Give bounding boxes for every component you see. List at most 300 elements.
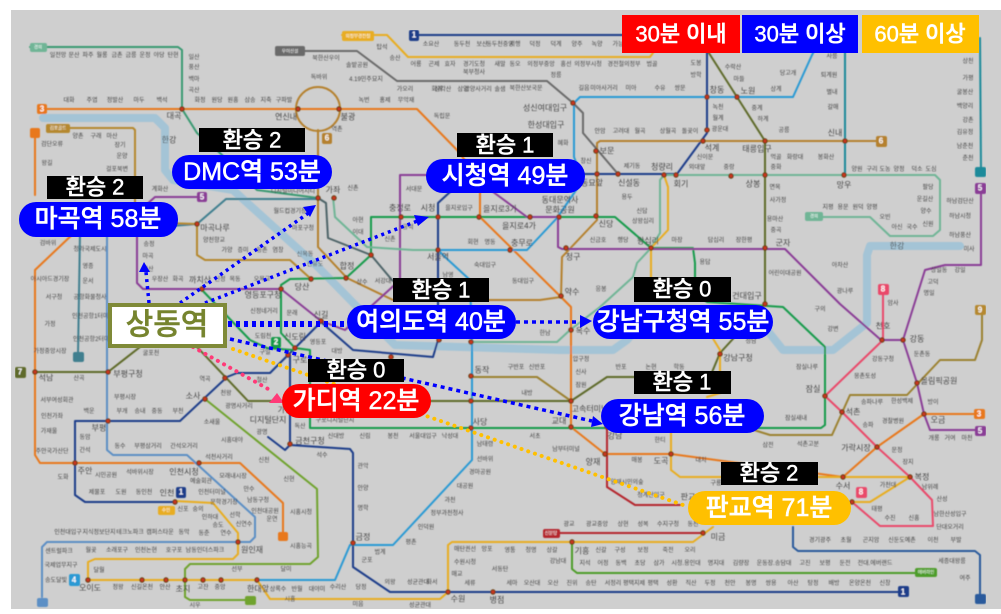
transfer tag: Magok: 환승 2 (66, 174, 124, 200)
station labels: small: 시흥대야 (221, 436, 244, 444)
legend: over 60 minutes: 60분 이상 (874, 22, 966, 46)
station labels: small: 신사 (575, 368, 587, 376)
station labels: small: 안산 (159, 583, 171, 591)
station labels: small: 온양온천 (849, 579, 871, 587)
station labels: small: 봉명 (745, 579, 757, 587)
station labels: small: 곤제 (428, 60, 440, 68)
station labels: small: 진위 (566, 579, 578, 587)
station labels: small: 신금호 (590, 236, 607, 244)
line number badges: 3 (40, 104, 45, 114)
station labels: small: 주안국가산단 (35, 447, 69, 455)
station labels: small: 가오리 (397, 85, 413, 93)
station labels: small: 굴포천 (143, 349, 159, 357)
station labels: small: 인덕원 (418, 523, 434, 531)
station labels: small: 미음 (352, 600, 364, 608)
station labels: small: 문정 (891, 447, 903, 454)
station labels: small: 어린이대공원 (768, 269, 802, 277)
station labels: large: 가산 (278, 404, 293, 414)
legend: over 30 minutes (742, 15, 858, 53)
station labels: small: 월곡 (634, 127, 646, 135)
line number badges: 5 (978, 426, 983, 436)
station labels: small: 지석 (579, 559, 591, 567)
station labels: small: 신이문 (697, 153, 714, 161)
station labels: small: 시흥시청 (290, 508, 312, 516)
station labels: small: 잠실나루 (796, 363, 819, 371)
station labels: small: 구의 (814, 305, 826, 313)
station labels: small: 대공원 (457, 482, 473, 490)
station labels: large: 연신내 (275, 112, 297, 122)
station labels: small: 가천대 (880, 481, 896, 489)
line number badges: 경의 (810, 212, 818, 220)
station labels: small: 용문 (837, 204, 849, 211)
station labels: small: 사릉 (826, 52, 838, 60)
station labels: small: 학동 (673, 363, 685, 371)
line number badges: 신분당 (545, 530, 557, 536)
station labels: small: 탑석 (376, 43, 388, 51)
station labels: small: 지식정보단지 (82, 528, 116, 536)
station labels: small: 성복 (637, 520, 649, 528)
station labels: small: 삼각산 (435, 85, 452, 93)
station labels: small: 지평 (822, 203, 834, 211)
station labels: small: 상계 (770, 85, 782, 93)
station labels: small: 상록수 (270, 585, 287, 593)
station labels: small: 가정 (44, 320, 56, 328)
station labels: small: 탕정 (807, 580, 819, 587)
station labels: small: 백석 (156, 96, 168, 104)
station labels: small: 매봉 (631, 456, 643, 464)
station labels: small: 달월 (93, 566, 105, 574)
line number badges: 의정부경전철 (346, 32, 370, 40)
station labels: small: 마장 (671, 236, 683, 244)
station labels: small: 동백 (615, 559, 627, 567)
station labels: small: 하남시청 (949, 212, 971, 220)
station labels: small: 삼전 (762, 441, 774, 449)
station labels: small: 천왕 (220, 389, 232, 397)
station labels: small: 팔당 (922, 183, 934, 191)
station labels: small: 오산대 (524, 579, 540, 587)
station labels: small: 중랑 (723, 164, 735, 171)
station labels: small: 송내 (134, 407, 146, 415)
station labels: large: 강동 (910, 334, 924, 344)
line number badges: 6 (879, 136, 884, 146)
station labels: small: 신림 (359, 432, 371, 440)
station labels: small: 구래 (90, 132, 102, 140)
line number badges: 경의 (34, 44, 42, 50)
station labels: small: 아시아드경기장 (31, 275, 70, 283)
station labels: small: 인천가좌 (41, 412, 64, 420)
station labels: small: 남부터미널 (552, 445, 580, 453)
station labels: small: 삼송 (244, 96, 256, 104)
station labels: small: 검바위 (40, 239, 56, 247)
station labels: small: 초당 (634, 559, 646, 567)
station labels: small: 모래내시장 (219, 472, 247, 480)
station labels: small: 망포 (481, 545, 493, 553)
station labels: large: 고속터미널 (572, 404, 608, 414)
station labels: small: 매교 (451, 570, 463, 578)
station labels: small: 경기광주 (809, 536, 832, 544)
station labels: small: 동두천중앙 (486, 40, 514, 48)
line number badges: 8 (881, 284, 886, 294)
station labels: small: 월롱 (96, 51, 108, 59)
pill: Magok (19, 202, 178, 237)
transfer tag: Pangyo (721, 460, 818, 486)
station labels: small: 고덕 (927, 279, 939, 286)
station labels: large: 석계 (705, 142, 719, 152)
station labels: small: 송산 (389, 54, 401, 62)
station labels: large: 마곡나루 (200, 224, 230, 232)
station labels: small: 백양리 (957, 102, 973, 110)
station labels: small: 시우 (189, 602, 201, 609)
station labels: small: 수리산 (330, 583, 347, 591)
station labels: small: 먹골 (770, 153, 782, 161)
station labels: small: 시민공원 (95, 471, 117, 479)
station labels: small: 양수 (920, 207, 932, 215)
station labels: small: 반월 (291, 585, 303, 593)
station labels: small: 석바위시장 (126, 468, 154, 476)
station labels: small: 신둔도예촌 (888, 536, 916, 544)
station labels: small: 봉화산 (818, 153, 835, 161)
station labels: small: 북한산우이 (312, 54, 340, 62)
station labels: small: 남한산성입구 (933, 510, 967, 518)
station labels: small: 개롱 (928, 434, 940, 442)
station labels: large: 천호 (876, 320, 890, 330)
pill: Gangnam: 강남역 56분 (619, 402, 745, 430)
station labels: small: 장한평 (736, 236, 752, 244)
station labels: large: 한강 (162, 134, 177, 144)
station labels: small: 강동구청 (872, 355, 894, 363)
station labels: small: 구성 (614, 546, 626, 554)
station labels: small: 보산 (476, 40, 488, 48)
station labels: small: 남위례 (922, 483, 938, 491)
station labels: small: 무악재 (398, 96, 414, 104)
station labels: large: 디지털단지 (250, 414, 286, 424)
station labels: small: 부평시장 (114, 393, 137, 401)
station labels: small: 명동 (484, 238, 496, 246)
station labels: small: 달미 (280, 565, 292, 573)
station labels: small: 서정리 (605, 579, 621, 587)
transfer tag: Magok (47, 174, 143, 200)
station labels: small: 성환 (666, 579, 678, 587)
station labels: small: 삼양 (457, 85, 469, 93)
station labels: large: 사당 (473, 416, 488, 426)
station labels: small: 직산 (685, 579, 697, 587)
station labels: large: 대곡 (167, 112, 181, 120)
station labels: small: 수지구청 (657, 520, 679, 528)
station labels: small: 4.19민주묘지 (349, 75, 383, 83)
station labels: small: 구파발 (276, 96, 293, 104)
dotted route: to DMC (180, 205, 316, 303)
legend: over 60 minutes (862, 15, 979, 53)
station labels: large: 수원 (451, 594, 465, 604)
station labels: small: 석천사거리 (205, 453, 233, 461)
line number badges: 1 (179, 488, 184, 496)
station labels: small: 당고개 (780, 69, 796, 77)
station labels: large: 충정로 (389, 202, 411, 212)
station labels: small: 구로디지털단지 (316, 416, 354, 424)
station labels: large: 군자 (776, 238, 791, 248)
station labels: small: 선유도 (307, 260, 324, 268)
station labels: small: 중계 (751, 104, 763, 112)
station labels: large: 주안 (78, 466, 93, 476)
station labels: large: 상봉 (746, 178, 760, 188)
station labels: small: 소요산 (423, 40, 440, 48)
station labels: small: 고잔 (197, 583, 209, 591)
station labels: small: 소래포구 (106, 546, 129, 554)
station labels: small: 미사 (963, 245, 975, 253)
station labels: small: 정부과천청사 (430, 509, 464, 517)
dotted route: to Gangnam-gu Office (516, 315, 592, 328)
station labels: small: 방학 (690, 71, 702, 79)
station labels: small: 부발 (950, 536, 962, 544)
station labels: large: 초지 (176, 584, 190, 594)
station labels: large: 문화공원 (545, 206, 575, 214)
station labels: small: 하계 (757, 115, 769, 123)
station labels: small: 인천대입구 (54, 528, 82, 536)
station labels: small: 강일 (954, 266, 966, 274)
station labels: large: 소사 (186, 392, 201, 400)
station labels: small: 영통 (504, 546, 516, 554)
station labels: small: 수진 (884, 514, 896, 522)
station labels: small: 산성 (936, 495, 948, 503)
station labels: large: 부평구청 (113, 368, 143, 378)
transfer tag: Yeouido: 환승 1 (412, 278, 470, 302)
station labels: small: 상갈 (546, 546, 558, 554)
station labels: small: 국수 (906, 224, 918, 231)
station labels: small: 제기동 (624, 162, 641, 170)
station labels: small: 송파나루 (861, 398, 884, 406)
station labels: large: 불광 (341, 112, 356, 122)
transfer tag: Gasan Digital (308, 358, 404, 382)
station labels: small: 동오 (509, 61, 521, 68)
station labels: large: 동작 (475, 364, 490, 374)
station labels: large: 옥수 (576, 326, 590, 336)
station labels: small: 동춘 (198, 529, 210, 537)
station labels: small: 암사 (887, 299, 899, 307)
station labels: small: 제물포 (89, 488, 106, 496)
station labels: small: 연수 (220, 529, 232, 537)
station labels: small: 인천대공원 (251, 507, 279, 515)
station labels: small: 성균관대 (409, 601, 431, 609)
station labels: small: 화서 (426, 578, 438, 586)
station labels: small: 북부청사 (463, 68, 486, 76)
line number badges: 4 (72, 576, 77, 584)
pill: Pangyo (688, 491, 851, 525)
station labels: small: 숙대입구 (474, 261, 497, 269)
station labels: small: 어정 (597, 559, 609, 567)
station labels: small: 봉천 (387, 432, 399, 440)
station labels: small: 역곡 (199, 375, 211, 383)
station labels: small: 용답 (699, 259, 711, 266)
station labels: small: 인하대 (202, 513, 218, 521)
station labels: large: 오금 (931, 416, 945, 424)
station labels: small: 강변 (827, 325, 839, 333)
station labels: small: 신길온천 (131, 583, 153, 591)
line number badges: 7 (18, 368, 23, 376)
station labels: small: 수원시청 (454, 558, 476, 566)
station labels: small: 중동 (151, 408, 163, 415)
station labels: large: 신길 (314, 310, 328, 320)
station labels: small: 철산 (256, 376, 268, 384)
station labels: small: 구리 (866, 165, 878, 173)
transfer tag: Gangnam-gu Office: 환승 0 (653, 276, 711, 302)
station labels: small: 석촌고분 (797, 440, 820, 448)
station labels: small: 신답 (636, 207, 648, 215)
station labels: small: 명일 (923, 289, 935, 297)
station labels: small: 예술회관 (190, 477, 213, 485)
station labels: small: 세종대왕릉 (938, 557, 966, 565)
station labels: small: 압구정 (573, 355, 589, 363)
station labels: large: 복정 (915, 472, 929, 482)
station labels: small: 도농 (879, 166, 891, 173)
station labels: small: 곤지암 (863, 536, 880, 544)
station labels: small: 삼양사거리 (464, 85, 492, 93)
station labels: large: 판교 (681, 492, 695, 502)
pill: Gangnam (601, 399, 764, 433)
station labels: small: 평택 (647, 579, 659, 587)
station labels: small: 신정네거리 (250, 307, 278, 315)
station labels: small: 효자 (444, 60, 456, 68)
station labels: small: 여주 (959, 574, 971, 582)
station labels: small: 걸포북변 (106, 165, 128, 173)
station labels: small: 양원 (851, 165, 863, 173)
station labels: small: 솔밭공원 (346, 61, 368, 69)
station labels: small: 김량장 (733, 559, 750, 567)
transfer tag: Gangnam: 환승 1 (653, 370, 711, 394)
station labels: small: 돌곶이 (682, 127, 698, 135)
station labels: small: 미아 (625, 84, 637, 92)
station labels: small: 굴봉산 (957, 88, 974, 96)
pill: City Hall (426, 159, 585, 193)
line number badges: 8 (859, 488, 864, 496)
station labels: small: 명학 (357, 504, 369, 512)
station labels: small: 문산 (68, 51, 80, 59)
station labels: small: 서강대 (375, 277, 391, 285)
station labels: small: 청계산입구 (637, 491, 665, 499)
station labels: small: 도림천 (255, 332, 271, 340)
pill: Magok: 마곡역 58분 (35, 205, 161, 233)
station labels: small: 상현 (617, 520, 629, 528)
station labels: small: 두정 (704, 580, 716, 587)
station labels: small: 센트럴파크 (45, 547, 73, 555)
station labels: large: 미금 (711, 532, 725, 542)
line number badges: 5 (200, 192, 205, 202)
station labels: small: 춘천 (962, 154, 974, 162)
station labels: small: 신연수 (236, 520, 253, 528)
station labels: large: 도곡 (654, 456, 668, 466)
station labels: small: 시흥능곡 (290, 542, 313, 550)
station labels: small: 월곶 (85, 546, 97, 554)
station labels: small: 신촌 (347, 184, 359, 192)
station labels: small: 녹양 (591, 40, 603, 48)
station labels: small: 탄현 (167, 51, 179, 59)
dotted route: to Gasan Digital (193, 347, 284, 403)
station labels: small: 둔촌동 (914, 350, 931, 358)
line number badges: 김포골드 (50, 124, 66, 130)
station labels: small: 안양 (357, 484, 369, 492)
station labels: small: 동대입구 (512, 277, 535, 285)
station labels: small: 백운 (83, 407, 95, 415)
station labels: small: 일산 (188, 53, 200, 61)
station labels: small: 의정부중앙 (527, 60, 555, 68)
station labels: large: 당산 (295, 282, 310, 292)
station labels: small: 광명사거리 (225, 402, 253, 410)
station labels: small: 흥선 (560, 60, 572, 68)
station labels: small: 운정 (139, 52, 151, 59)
station labels: small: 송도달빛 (45, 576, 68, 584)
station labels: small: 평촌 (405, 538, 417, 546)
station labels: small: 북한산보국문 (509, 84, 543, 92)
station labels: small: 안암 (594, 127, 606, 135)
station labels: small: 독립문 (434, 112, 451, 120)
station labels: small: 경전철의정부 (607, 60, 641, 68)
station labels: small: 덕계 (550, 40, 562, 48)
station labels: small: 답십리 (708, 236, 724, 244)
station labels: small: 동두천 (454, 40, 470, 48)
station labels: small: 운양 (116, 152, 128, 160)
station labels: small: 목동 (229, 276, 241, 283)
dotted route: to City Hall (205, 215, 429, 303)
pill: DMC: DMC역 53분 (183, 158, 321, 186)
station labels: small: 광운대 (712, 125, 728, 133)
line number badges: 5 (978, 184, 983, 192)
station labels: large: 동묘앞 (581, 178, 604, 188)
station labels: small: 인천공항2터미널 (73, 335, 115, 343)
station labels: small: 신촌 (384, 235, 396, 243)
station labels: small: 방이 (927, 398, 939, 406)
station labels: large: 가락시장 (841, 442, 871, 452)
station labels: small: 당정 (355, 583, 367, 591)
station labels: large: 올림픽공원 (921, 376, 957, 386)
station labels: large: 동대문역사 (542, 194, 579, 204)
station labels: small: 마산 (106, 132, 118, 140)
station labels: large: 구로 (293, 356, 307, 364)
station labels: small: 응봉 (595, 285, 607, 293)
transfer tag: DMC: 환승 2 (223, 128, 281, 152)
station labels: large: 합정 (340, 260, 354, 270)
station labels: small: 상일동 (931, 266, 948, 274)
interchange markers (33, 95, 926, 594)
station labels: small: 광교 (563, 521, 575, 528)
station labels: small: 화랑대 (787, 153, 803, 161)
station labels: small: 금촌 (111, 51, 123, 59)
station labels: small: 서동탄 (492, 565, 509, 573)
station labels: small: 풍산 (188, 63, 200, 71)
station labels: small: 상수 (356, 278, 368, 286)
station labels: large: 한대앞 (247, 584, 270, 594)
station labels: small: 쌍용 (765, 579, 777, 587)
station labels: small: 광교중앙 (586, 520, 609, 528)
station labels: large: 석촌 (846, 406, 860, 416)
station labels: small: 덕소 (911, 166, 923, 173)
station labels: small: 면목 (769, 183, 781, 191)
station labels: large: 인천 (160, 488, 174, 498)
station labels: large: 회기 (674, 180, 688, 188)
station labels: large: 금천구청 (295, 436, 325, 446)
station labels: small: 서구청 (46, 293, 62, 301)
station labels: small: 역촌 (331, 125, 343, 133)
station labels: small: 중화 (770, 164, 782, 171)
station labels: small: 녹천 (712, 103, 724, 111)
station labels: small: 전대.에버랜드 (858, 559, 893, 567)
station labels: small: 한티 (654, 436, 666, 444)
station labels: small: 마들 (733, 75, 745, 83)
station labels: small: 한남 (539, 329, 551, 337)
station labels: small: 영등포 (310, 338, 327, 346)
station labels: small: 독바위 (311, 73, 327, 81)
station labels: small: 양주 (571, 40, 583, 48)
line number badges: 1 (901, 588, 906, 596)
station labels: small: 청담 (745, 338, 757, 345)
